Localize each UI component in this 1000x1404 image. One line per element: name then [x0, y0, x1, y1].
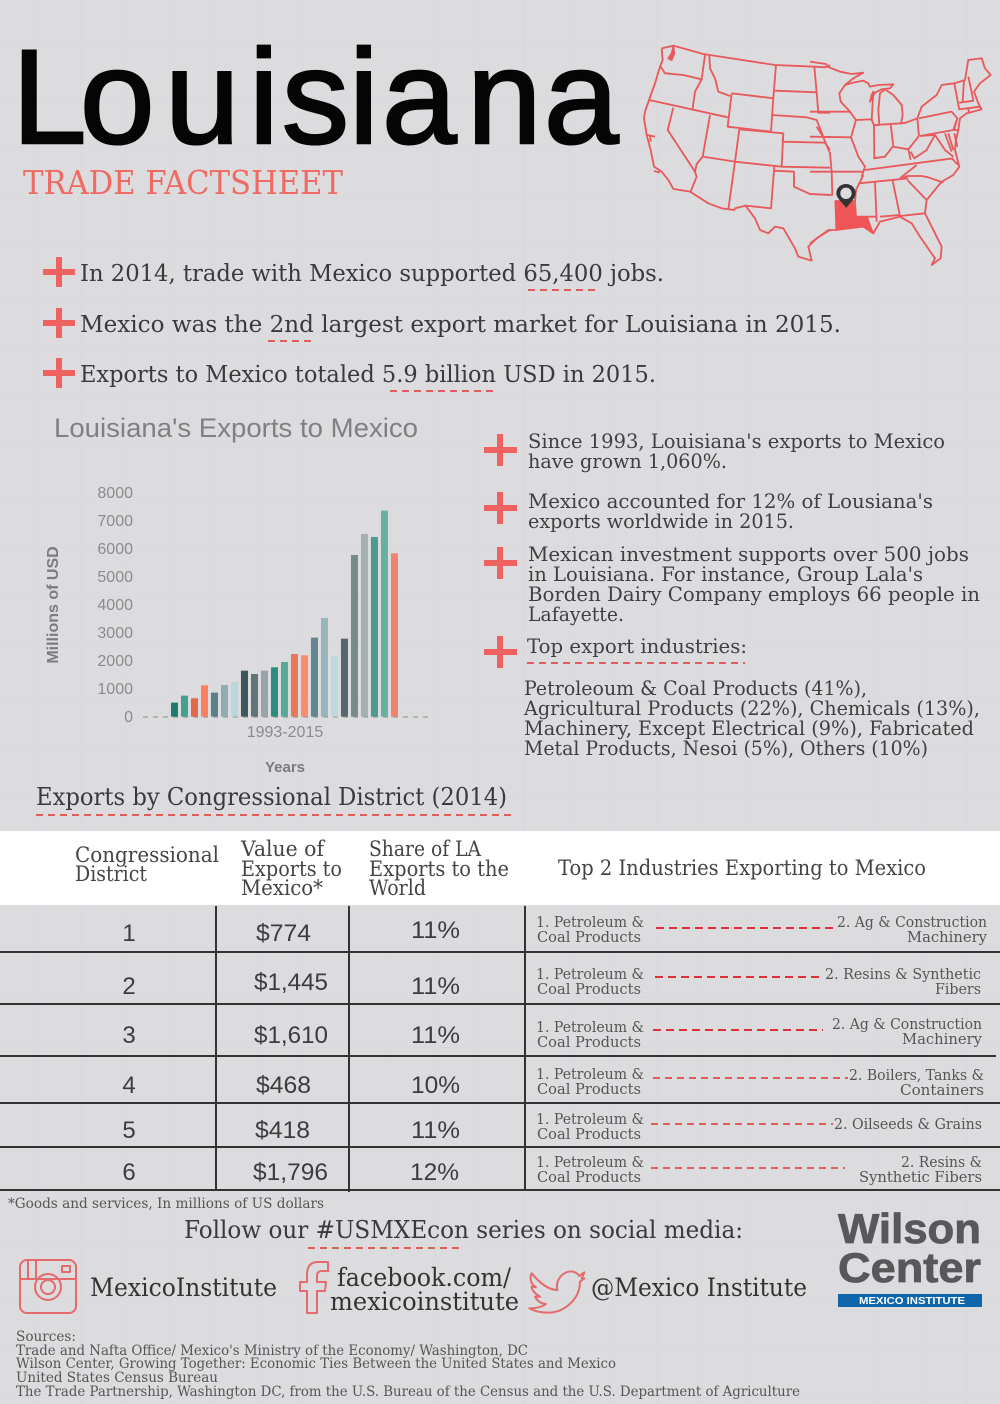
table row 1: 1 [122, 920, 136, 947]
y axis labels: 6000 [97, 541, 133, 558]
sources: The Trade Partnership, Washington DC, from the U.S. Bureau of the Census and the U.S. Department of Agriculture [16, 1384, 800, 1400]
y axis labels: 0 [124, 709, 133, 726]
panel: bar chart [45, 413, 430, 776]
table row 6: Synthetic Fibers [859, 1168, 982, 1186]
section heading: exports by district: Exports by Congressional District (2014) [36, 783, 507, 811]
table row 3: 3 [122, 1022, 136, 1049]
table row 1: 1. Petroleum & [536, 913, 644, 931]
table row 5: 11% [411, 1117, 460, 1144]
table header: Value of [240, 837, 326, 861]
fact: total exports: Exports to Mexico totaled 5.9 billion USD in 2015. [80, 362, 656, 388]
table row 3: Coal Products [537, 1033, 641, 1051]
sources: Wilson Center, Growing Together: Economic Ties Between the United States and Mexico [16, 1356, 616, 1372]
y axis labels: 7000 [97, 513, 133, 530]
table header: Exports to [241, 857, 342, 881]
table row 1: 2. Ag & Construction [837, 913, 987, 931]
fact: investment: in Louisiana. For instance, Group Lala's [528, 562, 923, 586]
table row 4: Containers [900, 1081, 984, 1099]
icon: plus [484, 636, 517, 668]
icon: instagram [20, 1260, 76, 1313]
title: Louisiana [12, 23, 619, 172]
table row 2: Fibers [935, 980, 981, 998]
table row 1: $774 [256, 920, 311, 947]
table row 6: 2. Resins & [901, 1153, 982, 1171]
y axis labels [97, 485, 133, 726]
fact: industries list: Agricultural Products (22%), Chemicals (13%), [523, 696, 980, 720]
icon: plus [43, 358, 75, 388]
table row 5: 5 [122, 1117, 136, 1144]
table row 3: 11% [411, 1022, 460, 1049]
icon: plus [484, 434, 517, 466]
icon: plus [484, 547, 517, 579]
subtitle: TRADE FACTSHEET [23, 163, 343, 202]
fact: investment: Borden Dairy Company employs 66 people in [528, 582, 980, 606]
table header: Top 2 Industries Exporting to Mexico [558, 856, 926, 880]
table row 4: 4 [122, 1072, 136, 1099]
fact: growth: Since 1993, Louisiana's exports to Mexico [528, 429, 945, 453]
table row 4: $468 [256, 1072, 311, 1099]
icon: Louisiana state highlight [835, 201, 873, 233]
fact: investment [528, 542, 980, 626]
table row 2: $1,445 [254, 969, 328, 996]
table row 3: 1. Petroleum & [536, 1018, 644, 1036]
table row 4 [122, 1065, 984, 1099]
table [0, 831, 1000, 1192]
y axis labels: 1000 [97, 681, 133, 698]
fact: jobs: In 2014, trade with Mexico supported 65,400 jobs. [80, 261, 664, 287]
logo: Wilson Center: Center [838, 1244, 981, 1291]
fact: industries list: Metal Products, Nesoi (5%), Others (10%) [524, 736, 928, 760]
key facts [43, 257, 841, 391]
table row 5 [122, 1110, 982, 1144]
chart title: Louisiana's Exports to Mexico [54, 413, 418, 443]
fact: share [528, 489, 933, 533]
logo: Wilson Center: MEXICO INSTITUTE [859, 1296, 965, 1307]
fact: investment: Lafayette. [528, 602, 624, 626]
social heading: Follow our #USMXEcon series on social media: [184, 1216, 743, 1244]
y axis labels: 8000 [97, 485, 133, 502]
table header: World [369, 876, 426, 900]
fact: growth [528, 429, 945, 473]
icon: plus [43, 257, 75, 287]
sources: United States Census Bureau [16, 1370, 218, 1386]
twitter handle: @Mexico Institute [591, 1273, 807, 1302]
logo: Wilson Center [838, 1205, 982, 1307]
logo: Wilson Center: Wilson [838, 1205, 981, 1252]
table row 2: 1. Petroleum & [536, 965, 644, 983]
y axis labels: 5000 [97, 569, 133, 586]
table row 5: $418 [255, 1117, 310, 1144]
fact: top export industries heading: Top export industries: [527, 634, 747, 658]
table header: Exports to the [369, 857, 509, 881]
table row 1 [122, 913, 988, 947]
y axis labels: 4000 [97, 597, 133, 614]
icon: twitter [529, 1271, 584, 1313]
instagram handle: MexicoInstitute [90, 1273, 277, 1302]
sources: Trade and Nafta Office/ Mexico's Ministry of the Economy/ Washington, DC [16, 1343, 528, 1359]
icon: map pin [836, 184, 856, 208]
icon: plus [43, 308, 75, 338]
y axis title: Millions of USD [45, 546, 62, 664]
table header: Share of LA [369, 837, 482, 861]
table row 3: $1,610 [254, 1022, 328, 1049]
icon: plus [484, 492, 517, 524]
table row 6 [122, 1153, 982, 1186]
table row 1: Coal Products [537, 928, 641, 946]
table row 2: Coal Products [537, 980, 641, 998]
fact: industries list: Machinery, Except Electrical (9%), Fabricated [524, 716, 974, 740]
table footnote: *Goods and services, In millions of US dollars [8, 1196, 324, 1212]
table row 6: Coal Products [537, 1168, 641, 1186]
table row 4: 2. Boilers, Tanks & [849, 1066, 984, 1084]
table row 6: 1. Petroleum & [536, 1153, 644, 1171]
table header: Mexico* [241, 876, 323, 900]
table row 3: Machinery [902, 1030, 983, 1048]
table header [0, 831, 1000, 905]
bars [171, 511, 398, 717]
table row 2: 2 [122, 973, 136, 1000]
facebook handle: facebook.com/ [337, 1263, 512, 1292]
table row 3: 2. Ag & Construction [832, 1015, 982, 1033]
icon: facebook [300, 1262, 328, 1313]
sources [16, 1329, 800, 1400]
x axis label: 1993-2015 [247, 724, 323, 741]
fact: share: Mexico accounted for 12% of Lousiana's [528, 489, 933, 513]
table row 5: 1. Petroleum & [536, 1110, 644, 1128]
table row 1: 11% [411, 917, 460, 944]
table row 2: 2. Resins & Synthetic [825, 965, 981, 983]
table row 5: 2. Oilseeds & Grains [834, 1115, 982, 1133]
sources: Sources: [16, 1329, 76, 1345]
table row 4: 10% [411, 1072, 460, 1099]
table row 5: Coal Products [537, 1125, 641, 1143]
map: United States with Louisiana highlighted [644, 46, 991, 265]
y axis labels: 3000 [97, 625, 133, 642]
panel: additional facts [484, 429, 980, 760]
fact: industries list: Petroleoum & Coal Products (41%), [524, 676, 867, 700]
table row 6: 6 [122, 1159, 136, 1186]
y axis labels: 2000 [97, 653, 133, 670]
table row 2 [122, 965, 981, 1000]
facebook handle [330, 1263, 519, 1316]
x axis title: Years [265, 759, 305, 776]
table row 2: 11% [411, 973, 460, 1000]
table header: District [75, 862, 147, 886]
fact: export market: Mexico was the 2nd largest export market for Louisiana in 2015. [80, 312, 841, 338]
table row 3 [122, 1015, 983, 1051]
fact: share: exports worldwide in 2015. [528, 509, 794, 533]
table row 4: 1. Petroleum & [536, 1065, 644, 1083]
fact: investment: Mexican investment supports over 500 jobs [528, 542, 969, 566]
fact: growth: have grown 1,060%. [528, 449, 727, 473]
table row 6: $1,796 [253, 1159, 328, 1186]
facebook handle: mexicoinstitute [330, 1287, 519, 1316]
table row 6: 12% [410, 1159, 459, 1186]
table row 1: Machinery [907, 928, 988, 946]
table header: Congressional [75, 843, 219, 867]
fact: industries list [523, 676, 980, 760]
table row 4: Coal Products [537, 1080, 641, 1098]
